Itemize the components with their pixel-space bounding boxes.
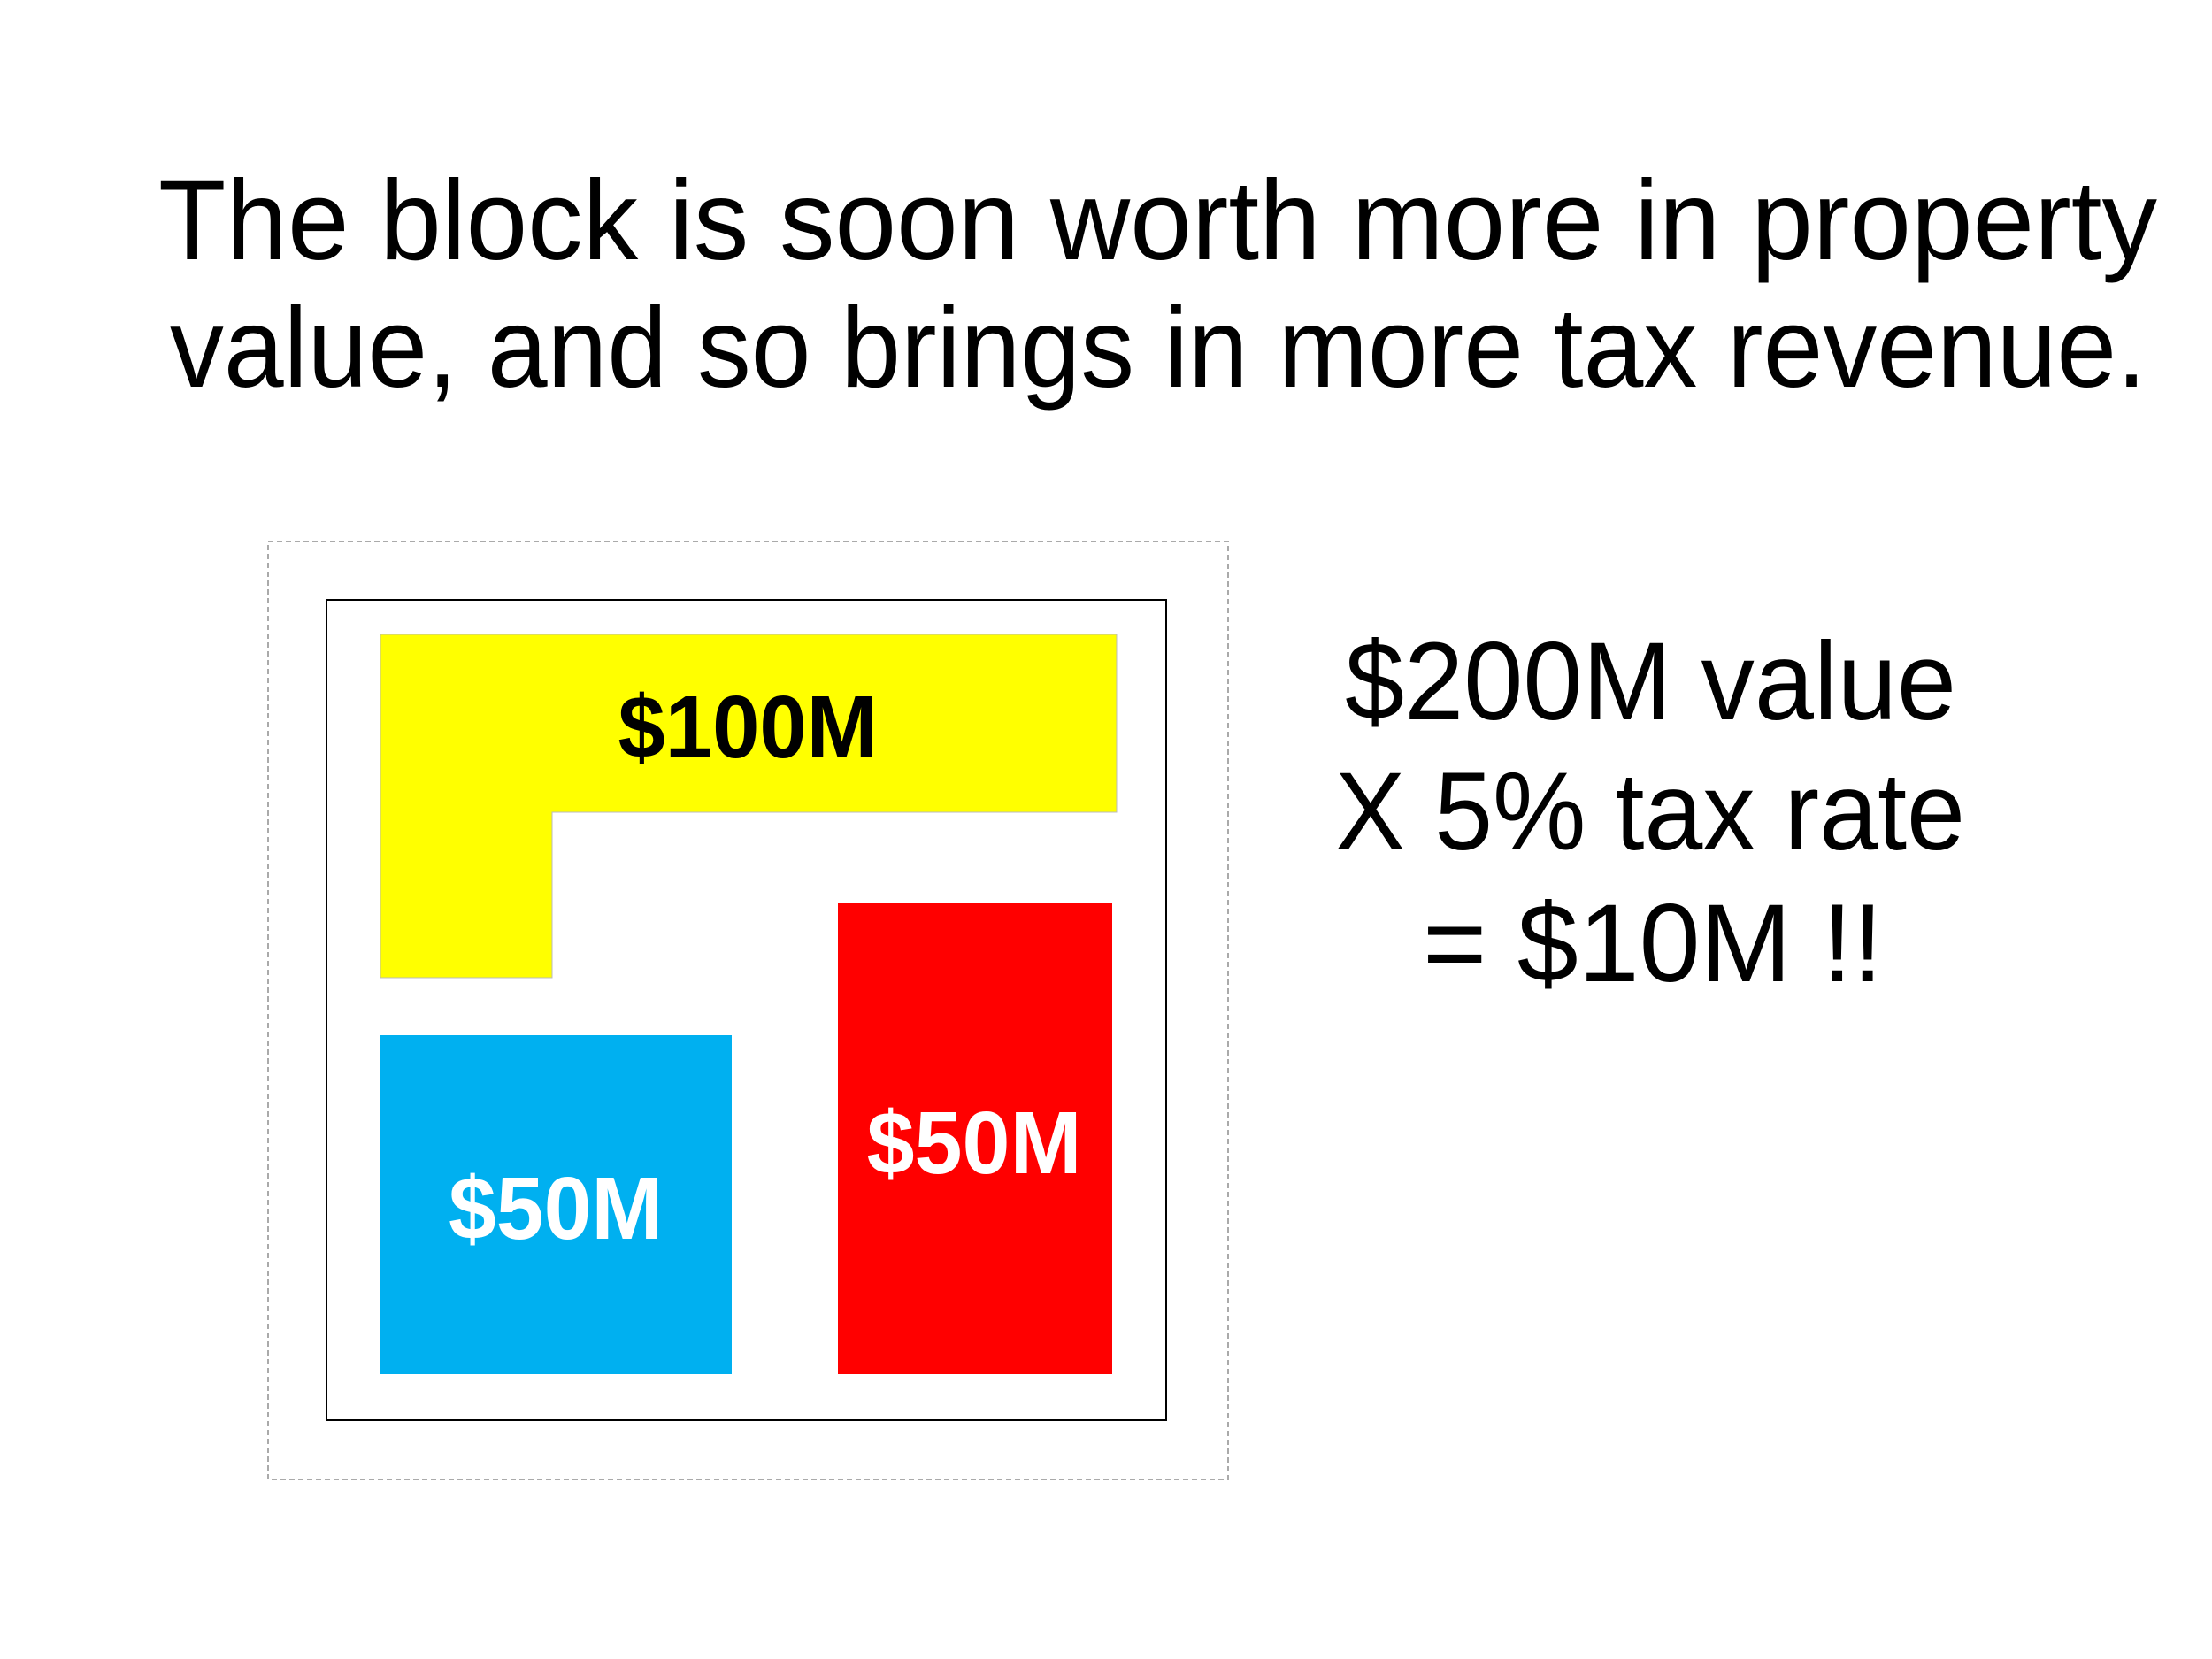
lot: yellow $100M <box>380 634 1117 978</box>
text block: tax calculation: = $10M !! <box>1423 882 1883 1005</box>
title: value, and so brings in more tax revenue. <box>170 285 2147 411</box>
title: The block is soon worth more in property <box>158 157 2157 284</box>
title <box>158 157 2157 411</box>
lot: red $50M: $50M <box>867 1094 1081 1193</box>
text block: tax calculation <box>1335 620 1965 1005</box>
lot: red $50M <box>838 903 1112 1374</box>
lot: blue $50M <box>380 1035 732 1374</box>
text block: tax calculation: X 5% tax rate <box>1335 750 1965 873</box>
lot: yellow $100M: $100M <box>618 678 878 777</box>
panel: city block diagram <box>268 541 1228 1479</box>
text block: tax calculation: $200M value <box>1345 620 1956 743</box>
lot: blue $50M: $50M <box>449 1159 663 1258</box>
